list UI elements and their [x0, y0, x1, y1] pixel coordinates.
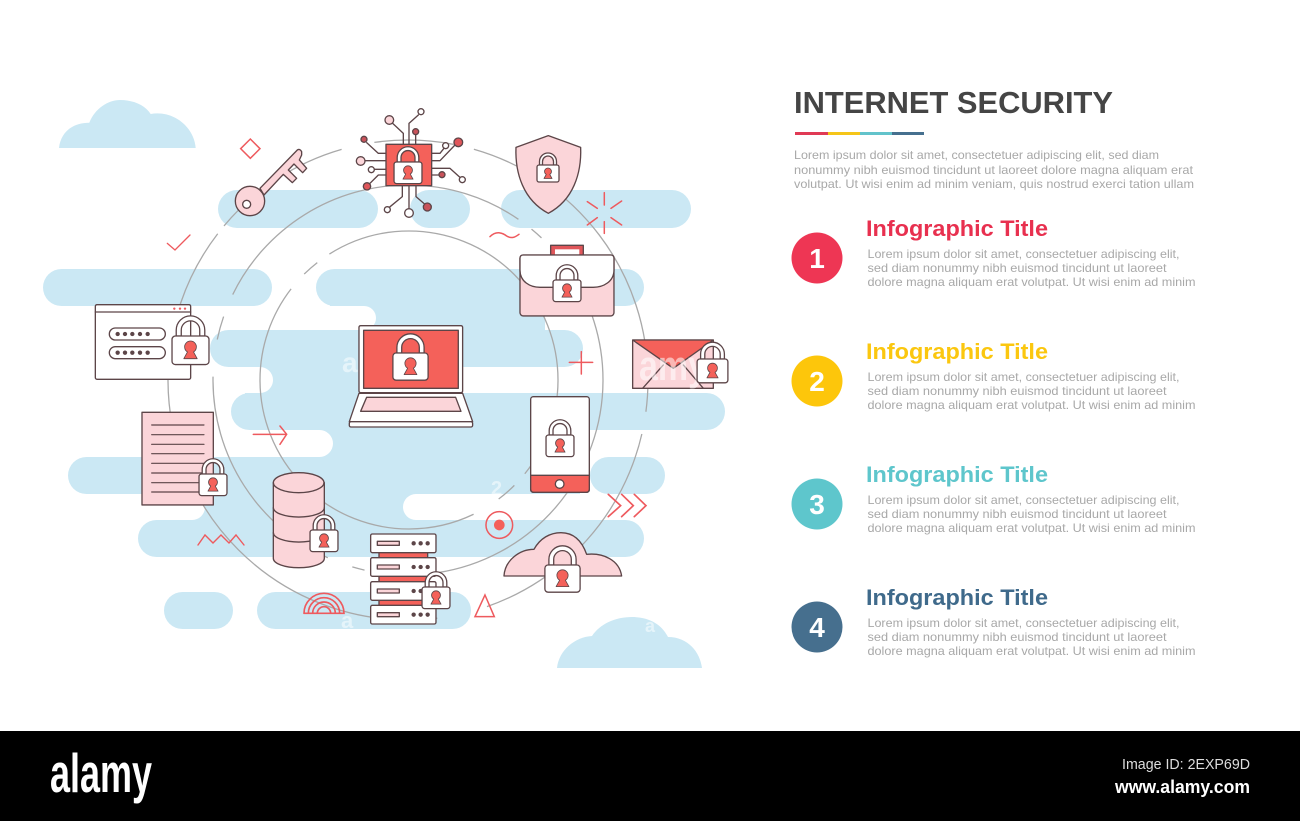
- icon: phone lock: [531, 397, 589, 492]
- small red accents: [167, 139, 646, 617]
- icon: cloud lock: [504, 533, 622, 592]
- diamond and check marks: [167, 139, 260, 250]
- icon: envelope lock: amy: [639, 342, 708, 389]
- stock watermark traces: a: [342, 347, 358, 378]
- item 2 text: dolore magna aliquam erat volutpat. Ut wisi enim ad minim: [868, 398, 1196, 412]
- decorative sky shapes: [43, 100, 725, 668]
- item 1 text: dolore magna aliquam erat volutpat. Ut wisi enim ad minim: [868, 275, 1196, 289]
- target, triangle, chevrons, rainbow: [304, 494, 646, 617]
- item 2 text: Lorem ipsum dolor sit amet, consectetuer adipiscing elit,: [868, 370, 1180, 384]
- item 2 title: Infographic Title: [866, 339, 1048, 364]
- intro paragraph: volutpat. Ut wisi enim ad minim veniam, quis nostrud exerci tation ullam: [794, 177, 1194, 191]
- image id: Image ID: 2EXP69D: [1122, 756, 1250, 773]
- website: www.alamy.com: [1114, 777, 1250, 797]
- intro paragraph: nonummy nibh euismod tincidunt ut laoreet dolore magna aliquam erat: [794, 163, 1194, 177]
- number badge 3: 3: [809, 489, 825, 520]
- number badge 2: [792, 356, 842, 406]
- item 2: [792, 339, 1196, 412]
- icon: laptop lock: [349, 326, 473, 427]
- item 4: [792, 585, 1196, 658]
- footer logo: alamy: [50, 742, 152, 804]
- number badge 4: 4: [809, 612, 825, 643]
- footer bar: [0, 731, 1300, 821]
- item 1 text: sed diam nonummy nibh euismod tincidunt ut laoreet: [868, 261, 1167, 275]
- sparkle and tilde: [490, 193, 622, 238]
- icon: shield lock: [516, 136, 581, 213]
- icon: key: [235, 149, 307, 216]
- item 3 title: Infographic Title: [866, 462, 1048, 487]
- item 1: [792, 216, 1196, 289]
- number badge 2: 2: [809, 366, 825, 397]
- arrow: [253, 426, 287, 444]
- intro paragraph: Lorem ipsum dolor sit amet, consectetuer adipiscing elit, sed diam: [794, 148, 1159, 162]
- icon: password window lock: [95, 305, 209, 379]
- item 3 text: [868, 493, 1196, 535]
- zigzag: [198, 535, 244, 545]
- heading underline colour bar: [795, 132, 924, 135]
- icon: circuit chip lock: [356, 109, 465, 217]
- item 3 text: sed diam nonummy nibh euismod tincidunt ut laoreet: [868, 507, 1167, 521]
- item 4 text: [868, 616, 1196, 658]
- intro paragraph: [794, 148, 1194, 191]
- item 3: [792, 462, 1196, 535]
- item 4 text: dolore magna aliquam erat volutpat. Ut wisi enim ad minim: [868, 644, 1196, 658]
- concentric dashed rings: [168, 140, 648, 620]
- item 2 text: [868, 370, 1196, 412]
- number badge 3: [792, 478, 842, 530]
- item 3 text: dolore magna aliquam erat volutpat. Ut wisi enim ad minim: [868, 521, 1196, 535]
- icon: briefcase lock: [520, 245, 614, 316]
- icon: server rack lock: [371, 534, 450, 624]
- number badge 1: 1: [809, 243, 825, 274]
- stock watermark traces: [341, 347, 656, 636]
- plus sign: [569, 352, 593, 374]
- item 4 text: sed diam nonummy nibh euismod tincidunt ut laoreet: [868, 630, 1167, 644]
- icon: database lock: [273, 473, 338, 568]
- item 4 title: Infographic Title: [866, 585, 1048, 610]
- heading: INTERNET SECURITY: [794, 85, 1113, 120]
- stock watermark traces: a: [341, 608, 354, 633]
- item 1 text: [868, 247, 1196, 289]
- white gaps in sky: [40, 306, 703, 520]
- item 1 text: Lorem ipsum dolor sit amet, consectetuer adipiscing elit,: [868, 247, 1180, 261]
- icon: document lock: [142, 412, 227, 505]
- stock watermark traces: 2: [491, 478, 502, 500]
- item 4 text: Lorem ipsum dolor sit amet, consectetuer adipiscing elit,: [868, 616, 1180, 630]
- item 1 title: Infographic Title: [866, 216, 1048, 241]
- number badge 4: [792, 602, 842, 652]
- number badge 1: [792, 232, 842, 284]
- item 3 text: Lorem ipsum dolor sit amet, consectetuer adipiscing elit,: [868, 493, 1180, 507]
- stock watermark traces: a: [645, 616, 656, 636]
- item 2 text: sed diam nonummy nibh euismod tincidunt ut laoreet: [868, 384, 1167, 398]
